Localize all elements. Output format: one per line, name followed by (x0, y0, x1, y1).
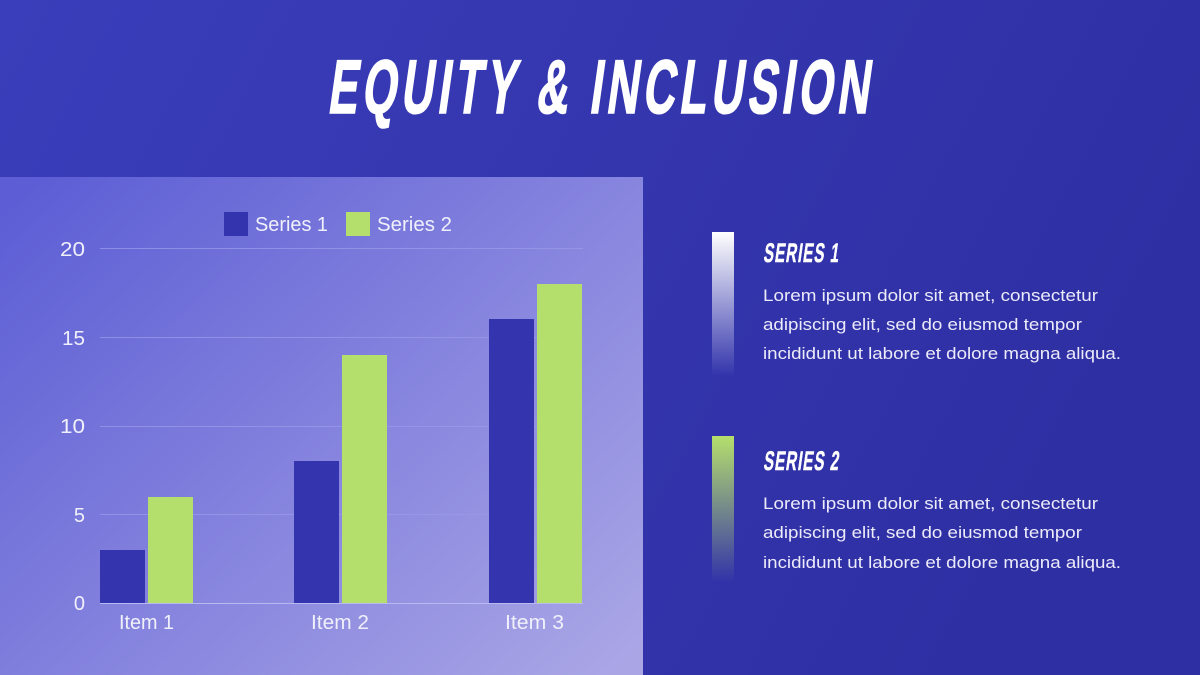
text: series 2 (763, 494, 1121, 572)
text: series 1: adipiscing elit, sed do eiusmod tempor (763, 315, 1082, 334)
text: series 2: incididunt ut labore et dolore magna aliqua. (763, 553, 1121, 572)
gridlines and value axis: 10 (60, 416, 85, 438)
category labels: Item 1 (119, 612, 174, 634)
panel: series 1 description (712, 232, 1121, 376)
chart legend (224, 212, 452, 236)
bars: item 3 (489, 284, 582, 603)
gridlines and value axis: 5 (74, 505, 85, 527)
heading: series 1: SERIES 1 (762, 238, 841, 268)
title: EQUITY & INCLUSION (325, 45, 878, 130)
text: series 2: adipiscing elit, sed do eiusmod tempor (763, 523, 1082, 542)
panel: series 2 description (712, 436, 1121, 582)
text: series 2: Lorem ipsum dolor sit amet, consectetur (763, 494, 1098, 513)
gridlines and value axis (60, 239, 583, 615)
gridlines and value axis: 15 (62, 328, 85, 350)
chart legend: Series 1 (255, 214, 328, 236)
category labels: Item 2 (311, 612, 369, 634)
category labels (119, 612, 564, 634)
gridlines and value axis: 20 (60, 239, 85, 261)
text: series 1: incididunt ut labore et dolore magna aliqua. (763, 344, 1121, 363)
panel: chart (0, 177, 643, 675)
accent bar: series 1 (712, 232, 734, 376)
bars: item 2 (294, 355, 387, 603)
text: series 1 (763, 286, 1121, 363)
accent bar: series 2 (712, 436, 734, 582)
chart legend: Series 2 (377, 214, 452, 236)
gridlines and value axis: 0 (74, 593, 85, 615)
text: series 1: Lorem ipsum dolor sit amet, consectetur (763, 286, 1098, 305)
bars: item 1 (100, 497, 193, 603)
heading: series 2: SERIES 2 (762, 446, 841, 476)
category labels: Item 3 (505, 612, 564, 634)
